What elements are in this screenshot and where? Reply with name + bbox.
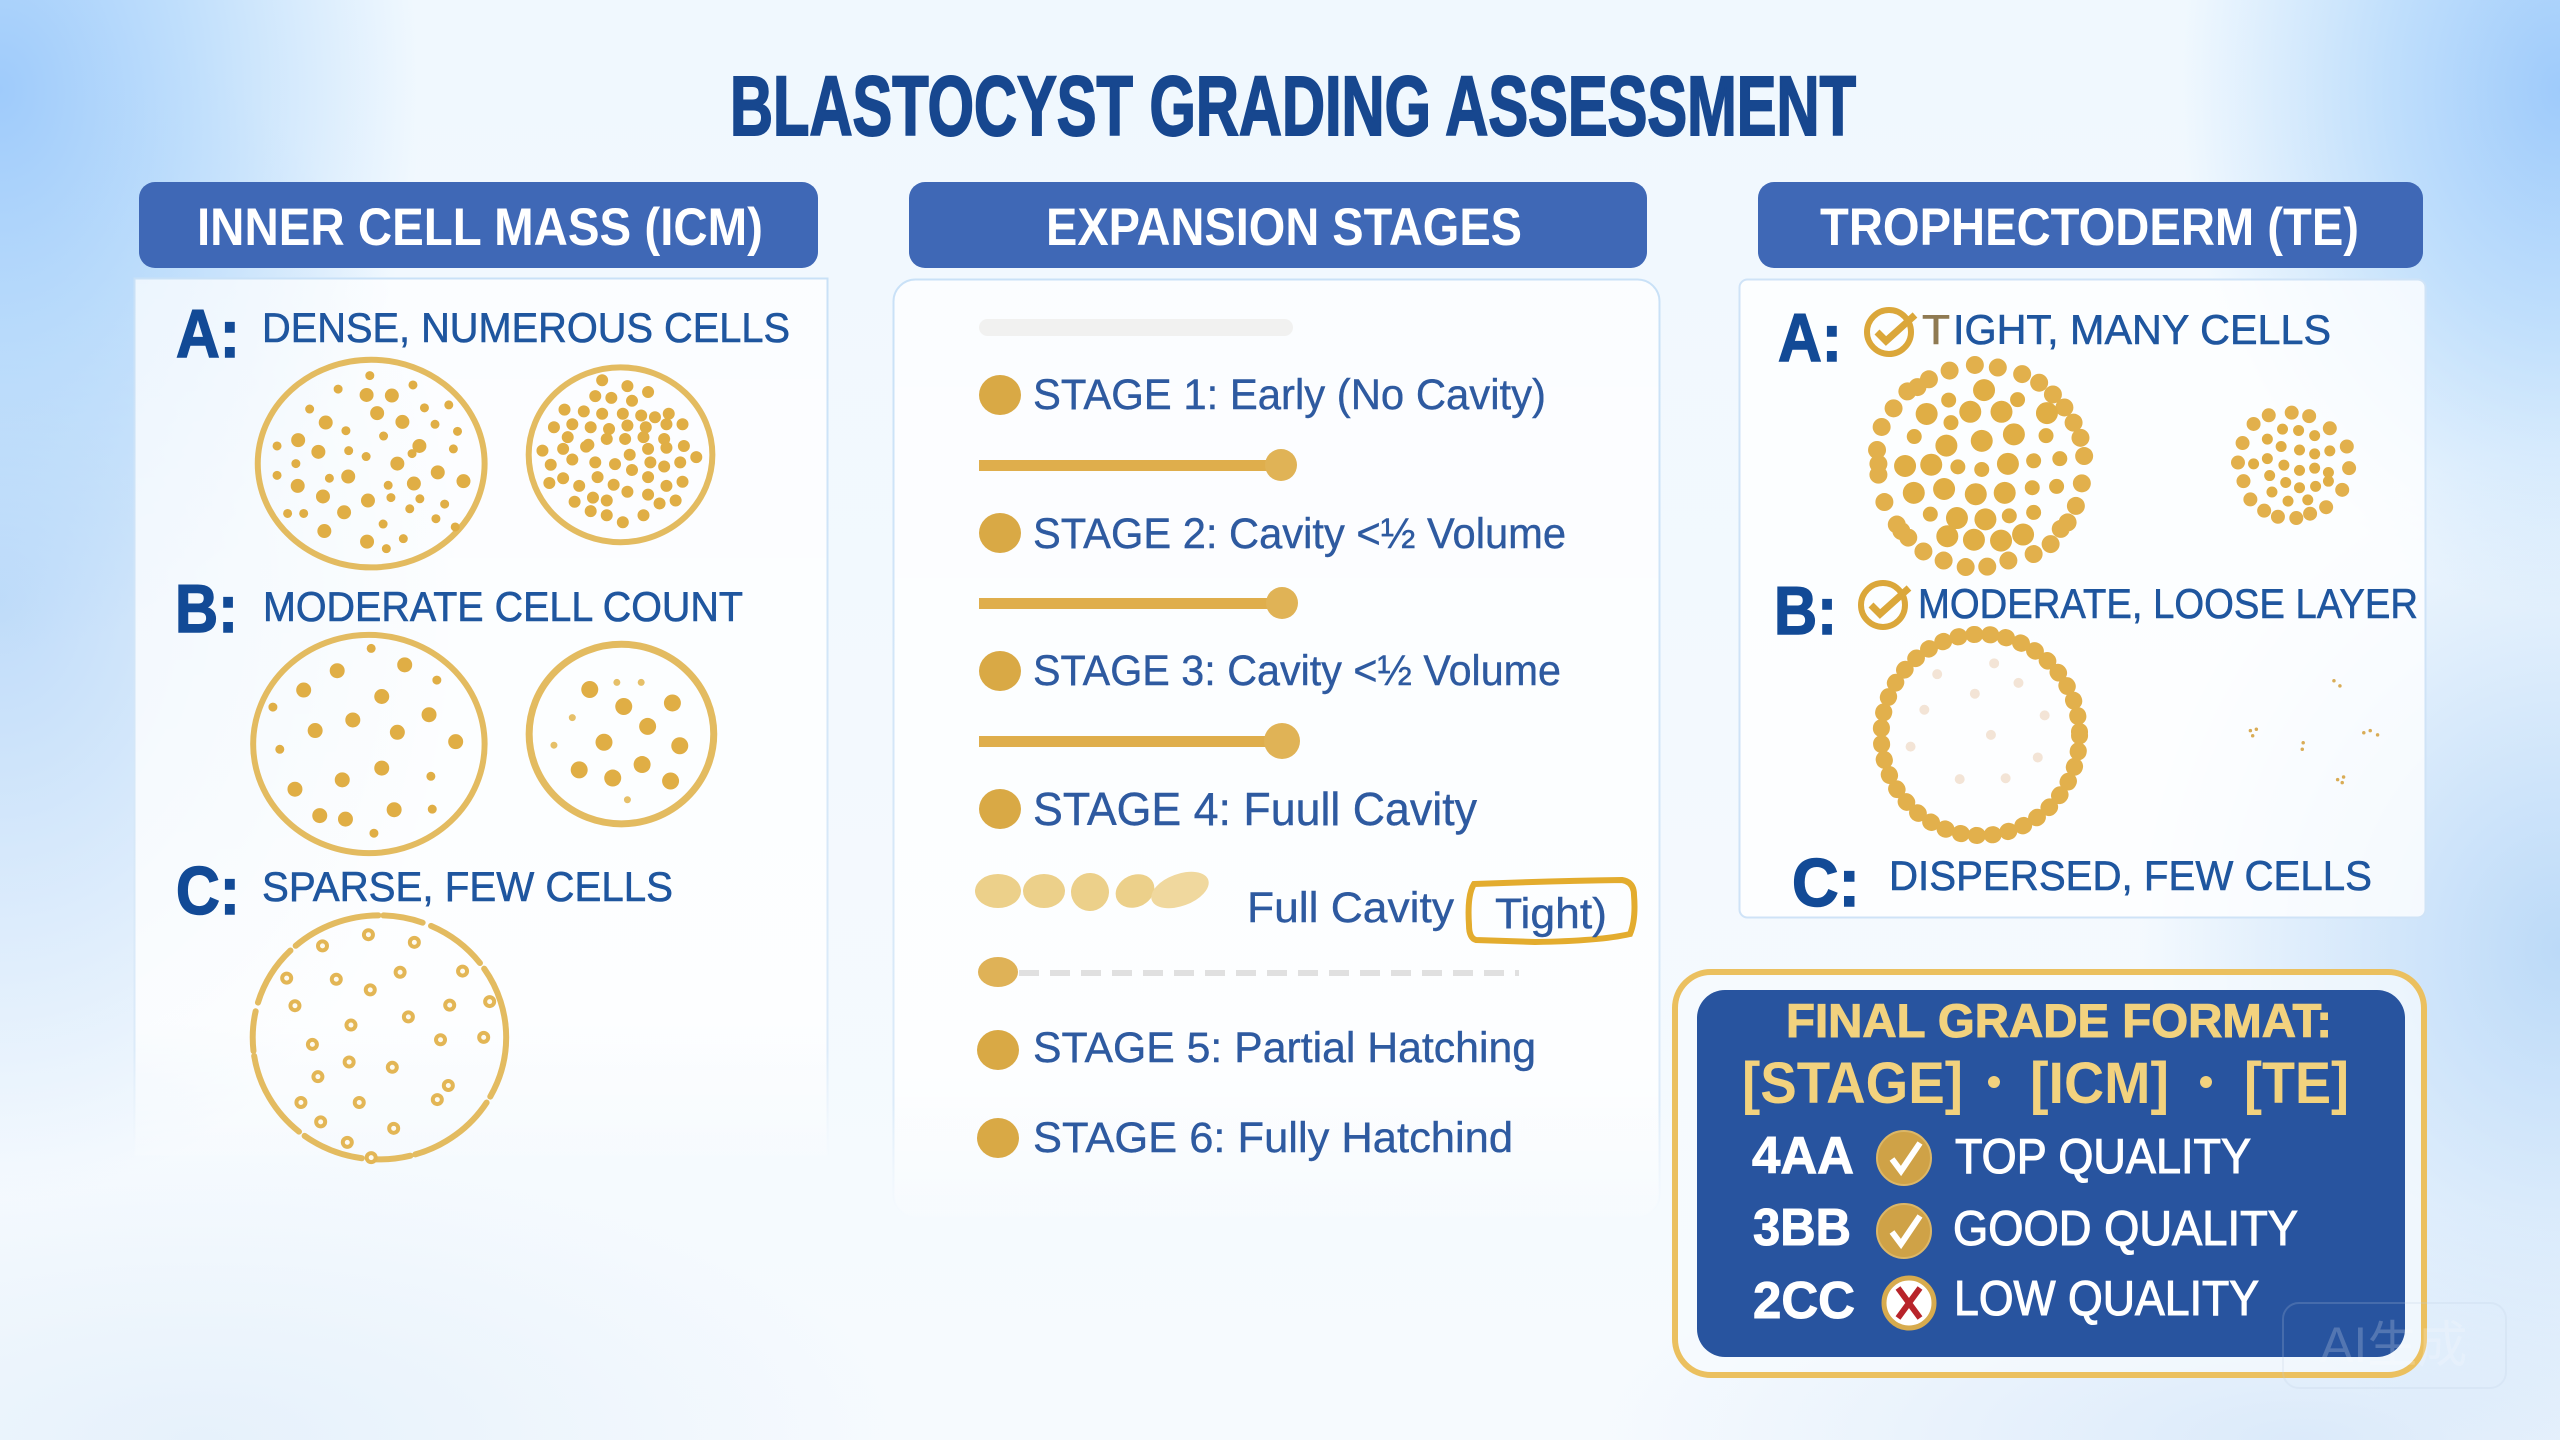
progress line 3 xyxy=(979,723,1300,759)
row: stage 6: STAGE 6: Fully Hatchind xyxy=(1033,1114,1513,1162)
illustration: TE grade B small xyxy=(2250,681,2378,783)
heading: inner cell mass: INNER CELL MASS (ICM) xyxy=(197,198,763,257)
text: ICM grade B description: MODERATE CELL COUNT xyxy=(263,583,743,630)
icon: five gold petals xyxy=(975,865,1214,916)
panel body: ICM xyxy=(134,278,828,1156)
row: stage 4: STAGE 4: Fuull Cavity xyxy=(1033,783,1477,835)
illustration: ICM grade B small xyxy=(529,644,714,824)
text: ICM grade A description: DENSE, NUMEROUS CELLS xyxy=(262,304,790,351)
label: TE grade C: C: xyxy=(1792,845,1860,921)
row: 4AA top quality: 4AA xyxy=(1752,1127,1854,1185)
illustration: ICM grade A large xyxy=(258,360,485,567)
label: TE grade B: B: xyxy=(1774,573,1837,649)
watermark xyxy=(2283,1303,2506,1388)
heading: final grade format: FINAL GRADE FORMAT: xyxy=(1786,994,2332,1047)
panel: final grade format xyxy=(1675,972,2424,1375)
heading: expansion stages xyxy=(909,182,1647,268)
illustration: ICM grade A small xyxy=(529,367,712,542)
text: TE grade A description: T xyxy=(1922,306,1950,353)
panel: expansion stages xyxy=(894,182,1660,1216)
row: stage 1: STAGE 1: Early (No Cavity) xyxy=(1033,371,1546,419)
formula: stage icm te: [TE] xyxy=(2244,1051,2349,1116)
row: 4AA top quality: TOP QUALITY xyxy=(1955,1130,2251,1184)
row: 2CC low quality: LOW QUALITY xyxy=(1954,1272,2259,1326)
progress line 2 xyxy=(979,587,1298,619)
outer gold frame xyxy=(1675,972,2424,1375)
illustration: TE grade A large xyxy=(1877,365,2084,567)
icon: check A xyxy=(1867,310,1915,354)
row: stage 2: STAGE 2: Cavity <½ Volume xyxy=(1033,510,1566,558)
text: full cavity: Full Cavity xyxy=(1247,884,1455,932)
row: 3BB good quality: 3BB xyxy=(1753,1199,1851,1257)
heading: trophectoderm xyxy=(1758,182,2423,268)
label: ICM grade B: B: xyxy=(175,571,238,647)
watermark: AI生成 xyxy=(2320,1317,2467,1373)
formula: stage icm te: [STAGE] xyxy=(1742,1051,1963,1116)
text: TE grade C description: DISPERSED, FEW CELLS xyxy=(1889,852,2372,899)
row: 2CC low quality: 2CC xyxy=(1753,1272,1855,1330)
row: 4AA top quality xyxy=(1752,1127,2251,1185)
text: ICM grade C description: SPARSE, FEW CELLS xyxy=(262,863,673,910)
icon: check B xyxy=(1861,583,1909,627)
row: stage 3: STAGE 3: Cavity <½ Volume xyxy=(1033,647,1561,695)
panel body: stages xyxy=(894,280,1660,1216)
text: TE grade B description: MODERATE, LOOSE LAYER xyxy=(1918,580,2418,627)
heading: expansion stages: EXPANSION STAGES xyxy=(1046,198,1522,257)
illustration: TE grade A small xyxy=(2238,413,2349,518)
formula: stage icm te: [ICM] xyxy=(2030,1051,2169,1116)
title: BLASTOCYST GRADING ASSESSMENT xyxy=(730,59,1856,153)
panel body: TE xyxy=(1740,280,2426,918)
illustration: TE grade B large xyxy=(1881,634,2080,836)
row: 3BB good quality: GOOD QUALITY xyxy=(1953,1202,2298,1256)
panel: inner cell mass xyxy=(134,182,828,1159)
row: 2CC low quality xyxy=(1753,1272,2259,1330)
row: 3BB good quality xyxy=(1753,1199,2298,1258)
progress line 1 xyxy=(979,449,1297,481)
callout: tight: Tight) xyxy=(1495,890,1607,938)
formula: stage icm te xyxy=(1742,1051,2349,1116)
heading: inner cell mass xyxy=(139,182,818,268)
panel: trophectoderm xyxy=(1740,182,2426,921)
placeholder bar xyxy=(979,319,1293,336)
heading: trophectoderm: TROPHECTODERM (TE) xyxy=(1820,198,2359,257)
row: stage 5: STAGE 5: Partial Hatching xyxy=(1033,1024,1536,1072)
dashed progress line xyxy=(978,957,1519,987)
inner blue card xyxy=(1697,990,2405,1357)
illustration: ICM grade B large xyxy=(253,635,485,853)
illustration: ICM grade C xyxy=(253,915,506,1159)
label: TE grade A: A: xyxy=(1778,300,1842,376)
text: TE grade A description: IGHT, MANY CELLS xyxy=(1953,306,2331,353)
label: ICM grade A: A: xyxy=(176,296,240,372)
label: ICM grade C: C: xyxy=(176,853,240,929)
callout: tight xyxy=(1469,880,1634,942)
